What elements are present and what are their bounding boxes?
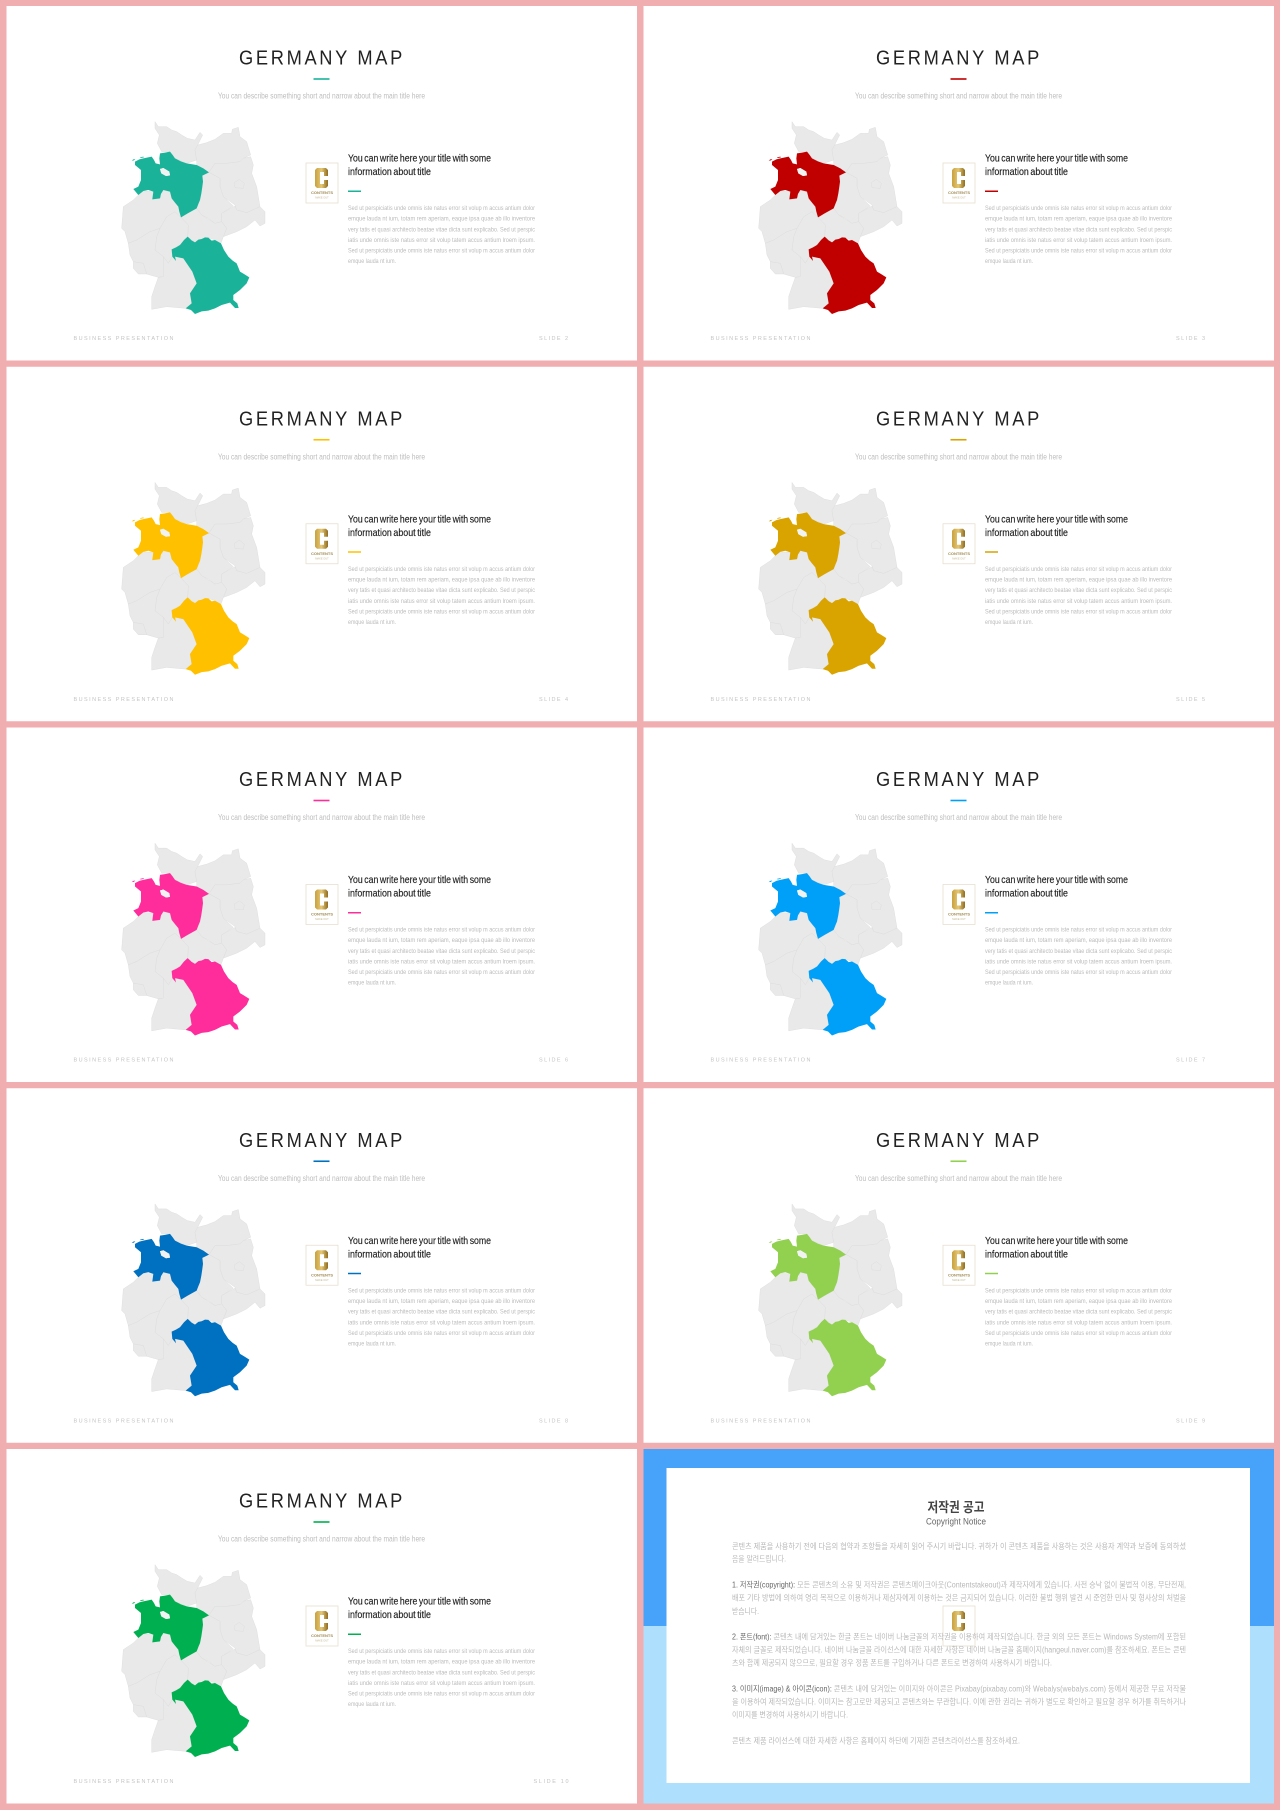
logo: CONTENTS bbox=[948, 912, 970, 916]
body text: iatis unde omnis iste natus error sit volup tatem accus antium lroem ipsum. bbox=[985, 1319, 1172, 1326]
body text: very tatis et quasi architecto beatae vitae dicta sunt explicabo. Sed ut perspic bbox=[985, 948, 1172, 955]
logo: MAKE OUT bbox=[315, 556, 329, 560]
text title: information about title bbox=[985, 888, 1068, 900]
body text: emque lauda nt ium. bbox=[348, 1701, 396, 1708]
small accent bbox=[348, 912, 361, 914]
logo: CONTENTS bbox=[311, 1272, 333, 1277]
logo bbox=[306, 524, 338, 564]
notice body: 을 이용하여 제작되었습니다. 이미지는 참고로만 제공되고 콘텐츠와는 무관합니다. 이에 관한 권리는 귀하가 별도로 확인하고 필요할 경우 허가를 취득하거나 bbox=[732, 1696, 1187, 1706]
small accent bbox=[985, 190, 998, 192]
subtitle: You can describe something short and narrow about the main title here bbox=[218, 813, 425, 822]
body text: very tatis et quasi architecto beatae vitae dicta sunt explicabo. Sed ut perspic bbox=[985, 587, 1172, 594]
text title bbox=[348, 513, 491, 539]
body text: emque lauda nt ium. bbox=[985, 258, 1033, 265]
logo: CONTENTS bbox=[311, 190, 333, 195]
body text: Sed ut perspiciatis unde omnis iste natus error sit volup m accus antium dolor bbox=[985, 926, 1172, 934]
map of Germany bbox=[122, 1204, 265, 1396]
accent bar bbox=[950, 78, 966, 80]
panel: copyright notice bbox=[644, 1449, 1274, 1804]
footer bbox=[74, 1779, 568, 1785]
logo: MAKE OUT bbox=[315, 1638, 329, 1642]
notice body: 배포 기타 방법에 의하여 영리 목적으로 이용하거나 제삼자에게 이용하는 것은 금지되어 있습니다. 이러한 불법 행위 발견 시 준엄한 민사 및 형사상의 처벌을 bbox=[732, 1592, 1186, 1602]
notice body: 자체의 글꼴로 제작되었습니다. 네이버 나눔글꼴 라이선스에 대한 자세한 사항은 네이버 나눔글꼴 홈페이지(hangeul.naver.com)를 참조하세요. 폰트는 콘텐 bbox=[732, 1644, 1186, 1654]
subtitle: You can describe something short and narrow about the main title here bbox=[218, 92, 425, 100]
accent bar bbox=[314, 1521, 330, 1523]
small accent bbox=[985, 912, 998, 914]
footer bbox=[710, 336, 1205, 342]
body text: emque lauda nt ium, totam rem aperiam, eaque ipsa quae ab illo inventore bbox=[985, 216, 1173, 223]
body text: emque lauda nt ium. bbox=[348, 619, 396, 626]
body text bbox=[985, 205, 1173, 265]
subtitle: You can describe something short and narrow about the main title here bbox=[218, 1174, 425, 1183]
panel: slide 3 red bbox=[644, 6, 1274, 360]
body text: iatis unde omnis iste natus error sit volup tatem accus antium lroem ipsum. bbox=[985, 237, 1172, 244]
body text: iatis unde omnis iste natus error sit volup tatem accus antium lroem ipsum. bbox=[348, 1319, 535, 1326]
footer: BUSINESS PRESENTATION bbox=[710, 1058, 811, 1064]
subtitle: You can describe something short and narrow about the main title here bbox=[855, 452, 1062, 461]
text title bbox=[985, 1235, 1128, 1260]
body text: Sed ut perspiciatis unde omnis iste natus error sit volup m accus antium dolor bbox=[348, 926, 535, 934]
footer: BUSINESS PRESENTATION bbox=[74, 336, 174, 342]
subtitle: You can describe something short and narrow about the main title here bbox=[218, 1534, 425, 1544]
logo bbox=[943, 163, 975, 203]
body text: Sed ut perspiciatis unde omnis iste natus error sit volup m accus antium dolor bbox=[985, 969, 1172, 976]
footer: SLIDE 10 bbox=[534, 1779, 568, 1785]
heading: GERMANY MAP bbox=[876, 46, 1042, 70]
body text: emque lauda nt ium. bbox=[985, 980, 1033, 986]
text title: You can write here your title with some bbox=[985, 152, 1128, 164]
body text: iatis unde omnis iste natus error sit volup tatem accus antium lroem ipsum. bbox=[348, 598, 535, 605]
body text: emque lauda nt ium, totam rem aperiam, eaque ipsa quae ab illo inventore bbox=[348, 216, 536, 223]
text title: information about title bbox=[348, 527, 431, 539]
text title: You can write here your title with some bbox=[348, 152, 491, 164]
footer: BUSINESS PRESENTATION bbox=[74, 1418, 174, 1424]
body text: iatis unde omnis iste natus error sit volup tatem accus antium lroem ipsum. bbox=[985, 958, 1172, 966]
body text bbox=[348, 1287, 536, 1347]
body text: emque lauda nt ium. bbox=[348, 1340, 396, 1347]
footer: SLIDE 2 bbox=[539, 336, 568, 342]
panel: slide 7 sky blue bbox=[644, 728, 1274, 1082]
logo: MAKE OUT bbox=[315, 917, 329, 921]
body text bbox=[348, 566, 536, 626]
text title: You can write here your title with some bbox=[985, 1235, 1128, 1247]
logo: CONTENTS bbox=[311, 1633, 333, 1638]
notice body: 이미지를 변경하여 사용하시기 바랍니다. bbox=[732, 1709, 848, 1719]
panel: slide 4 yellow bbox=[6, 367, 637, 721]
body text: iatis unde omnis iste natus error sit volup tatem accus antium lroem ipsum. bbox=[985, 598, 1172, 605]
body text: emque lauda nt ium. bbox=[985, 1340, 1033, 1347]
logo: CONTENTS bbox=[948, 551, 970, 556]
text title: information about title bbox=[348, 1248, 431, 1260]
subtitle: You can describe something short and narrow about the main title here bbox=[855, 92, 1062, 100]
body text: very tatis et quasi architecto beatae vitae dicta sunt explicabo. Sed ut perspic bbox=[985, 1309, 1172, 1316]
footer bbox=[710, 1418, 1205, 1424]
panel: slide 6 pink bbox=[6, 728, 637, 1082]
logo bbox=[306, 163, 338, 203]
logo: CONTENTS bbox=[948, 190, 970, 195]
accent bar bbox=[314, 1160, 330, 1162]
logo bbox=[943, 884, 975, 924]
heading: GERMANY MAP bbox=[876, 1129, 1042, 1152]
footer bbox=[710, 697, 1205, 703]
text title: information about title bbox=[348, 888, 431, 900]
map of Germany bbox=[122, 843, 265, 1035]
notice body: 콘텐츠 제품을 사용하기 전에 다음의 협약과 조항들을 자세히 읽어 주시기 바랍니다. 귀하가 이 콘텐츠 제품을 사용하는 것은 사용자 계약과 보증에 동의하셨 bbox=[732, 1541, 1187, 1551]
text title: You can write here your title with some bbox=[348, 1235, 491, 1247]
logo: MAKE OUT bbox=[952, 1278, 966, 1282]
body text: Sed ut perspiciatis unde omnis iste natus error sit volup m accus antium dolor bbox=[985, 205, 1172, 212]
text title: information about title bbox=[985, 1248, 1068, 1260]
text title bbox=[348, 1235, 491, 1260]
text title: information about title bbox=[985, 166, 1068, 178]
text title bbox=[348, 152, 491, 178]
notice body: 2. 폰트(font): 콘텐츠 내에 담겨있는 한글 폰트는 네이버 나눔글꼴의 저작권을 이용하여 제작되었습니다. 한글 외의 모든 폰트는 Windows System에 포함된 bbox=[732, 1632, 1186, 1642]
body text: emque lauda nt ium, totam rem aperiam, eaque ipsa quae ab illo inventore bbox=[348, 1298, 536, 1305]
small accent bbox=[348, 1273, 361, 1274]
subtitle: You can describe something short and narrow about the main title here bbox=[855, 813, 1062, 822]
logo: MAKE OUT bbox=[952, 196, 966, 200]
accent bar bbox=[314, 800, 330, 801]
text title: information about title bbox=[348, 1609, 431, 1621]
accent bar bbox=[950, 439, 966, 441]
footer bbox=[74, 1058, 568, 1064]
accent bar bbox=[950, 800, 966, 801]
body text: Sed ut perspiciatis unde omnis iste natus error sit volup m accus antium dolor bbox=[348, 248, 535, 255]
heading: GERMANY MAP bbox=[876, 768, 1042, 791]
footer: SLIDE 8 bbox=[539, 1418, 568, 1424]
panel: slide 8 dark blue bbox=[6, 1088, 637, 1443]
body text: Sed ut perspiciatis unde omnis iste natus error sit volup m accus antium dolor bbox=[348, 566, 535, 573]
accent bar bbox=[314, 439, 330, 441]
text title bbox=[348, 874, 491, 900]
body text: very tatis et quasi architecto beatae vitae dicta sunt explicabo. Sed ut perspic bbox=[348, 587, 535, 594]
body text: emque lauda nt ium. bbox=[985, 619, 1033, 626]
heading: GERMANY MAP bbox=[876, 407, 1042, 430]
logo bbox=[943, 524, 975, 564]
footer: BUSINESS PRESENTATION bbox=[710, 697, 811, 703]
notice title: 저작권 공고 bbox=[928, 1500, 984, 1515]
notice body: 츠와 함께 제공되지 않으므로, 필요할 경우 정품 폰트를 구입하거나 다른 폰트로 변경하여 사용하시기 바랍니다. bbox=[732, 1657, 1052, 1667]
body text: emque lauda nt ium, totam rem aperiam, eaque ipsa quae ab illo inventore bbox=[348, 937, 536, 944]
body text: Sed ut perspiciatis unde omnis iste natus error sit volup m accus antium dolor bbox=[985, 566, 1172, 573]
notice title: Copyright Notice bbox=[926, 1516, 986, 1526]
body text: Sed ut perspiciatis unde omnis iste natus error sit volup m accus antium dolor bbox=[348, 1691, 535, 1698]
footer: SLIDE 7 bbox=[1176, 1058, 1205, 1064]
small accent bbox=[985, 1273, 998, 1274]
footer bbox=[74, 1418, 568, 1424]
footer bbox=[74, 336, 568, 342]
logo: CONTENTS bbox=[311, 551, 333, 556]
body text: iatis unde omnis iste natus error sit volup tatem accus antium lroem ipsum. bbox=[348, 237, 535, 244]
logo bbox=[306, 1245, 338, 1285]
logo: MAKE OUT bbox=[315, 196, 329, 200]
accent bar bbox=[314, 78, 330, 80]
text title: You can write here your title with some bbox=[985, 874, 1128, 886]
subtitle: You can describe something short and narrow about the main title here bbox=[218, 452, 425, 461]
map of Germany bbox=[122, 122, 265, 314]
footer: BUSINESS PRESENTATION bbox=[74, 1779, 174, 1785]
logo: MAKE OUT bbox=[315, 1278, 329, 1282]
heading: GERMANY MAP bbox=[239, 1129, 405, 1152]
body text: Sed ut perspiciatis unde omnis iste natus error sit volup m accus antium dolor bbox=[985, 1330, 1172, 1337]
small accent bbox=[348, 1634, 361, 1635]
footer: SLIDE 6 bbox=[539, 1058, 568, 1064]
notice title bbox=[926, 1500, 986, 1526]
notice body: 받습니다. bbox=[732, 1606, 759, 1616]
footer bbox=[74, 697, 568, 703]
logo bbox=[306, 1606, 338, 1646]
small accent bbox=[348, 551, 361, 553]
body text: emque lauda nt ium, totam rem aperiam, eaque ipsa quae ab illo inventore bbox=[348, 1659, 536, 1666]
panel: slide 5 gold bbox=[644, 367, 1274, 721]
small accent bbox=[985, 551, 998, 553]
text title: You can write here your title with some bbox=[985, 513, 1128, 525]
panel: slide 9 light green bbox=[644, 1088, 1274, 1443]
text title: information about title bbox=[985, 527, 1068, 539]
text title: information about title bbox=[348, 166, 431, 178]
footer: SLIDE 5 bbox=[1176, 697, 1205, 703]
heading: GERMANY MAP bbox=[239, 768, 405, 791]
body text: very tatis et quasi architecto beatae vitae dicta sunt explicabo. Sed ut perspic bbox=[985, 226, 1172, 233]
body text: emque lauda nt ium, totam rem aperiam, eaque ipsa quae ab illo inventore bbox=[985, 576, 1173, 583]
footer: SLIDE 9 bbox=[1176, 1418, 1205, 1424]
map of Germany bbox=[122, 482, 265, 675]
subtitle: You can describe something short and narrow about the main title here bbox=[855, 1174, 1062, 1183]
map of Germany bbox=[759, 1204, 902, 1396]
body text: emque lauda nt ium. bbox=[348, 258, 396, 265]
body text: Sed ut perspiciatis unde omnis iste natus error sit volup m accus antium dolor bbox=[348, 205, 535, 212]
logo: MAKE OUT bbox=[952, 917, 966, 921]
map of Germany bbox=[122, 1565, 265, 1757]
small accent bbox=[348, 190, 361, 192]
body text: very tatis et quasi architecto beatae vitae dicta sunt explicabo. Sed ut perspic bbox=[348, 226, 535, 233]
logo: CONTENTS bbox=[311, 912, 333, 916]
body text: Sed ut perspiciatis unde omnis iste natus error sit volup m accus antium dolor bbox=[985, 248, 1172, 255]
body text: very tatis et quasi architecto beatae vitae dicta sunt explicabo. Sed ut perspic bbox=[348, 948, 535, 955]
body text bbox=[985, 926, 1173, 986]
footer: BUSINESS PRESENTATION bbox=[710, 336, 811, 342]
body text: emque lauda nt ium, totam rem aperiam, eaque ipsa quae ab illo inventore bbox=[985, 1298, 1173, 1305]
body text: emque lauda nt ium, totam rem aperiam, eaque ipsa quae ab illo inventore bbox=[985, 937, 1173, 944]
body text: Sed ut perspiciatis unde omnis iste natus error sit volup m accus antium dolor bbox=[985, 608, 1172, 615]
logo bbox=[306, 884, 338, 924]
body text: Sed ut perspiciatis unde omnis iste natus error sit volup m accus antium dolor bbox=[348, 1287, 535, 1294]
text title bbox=[348, 1596, 491, 1621]
notice body: 1. 저작권(copyright): 모든 콘텐츠의 소유 및 저작권은 콘텐츠메이크아웃(Contentstakeout)과 제작자에게 있습니다. 사전 승낙 없이 불법적 이용, 무단전재, bbox=[732, 1580, 1186, 1590]
notice body: 3. 이미지(image) & 아이콘(icon): 콘텐츠 내에 담겨있는 이미지와 아이콘은 Pixabay(pixabay.com)와 Webalys(webalys.com) 등에서 제공한 무료 저작물 bbox=[732, 1683, 1186, 1693]
footer: SLIDE 4 bbox=[539, 697, 568, 703]
body text: emque lauda nt ium, totam rem aperiam, eaque ipsa quae ab illo inventore bbox=[348, 576, 536, 583]
text title: You can write here your title with some bbox=[348, 1596, 491, 1608]
heading: GERMANY MAP bbox=[239, 407, 405, 430]
logo: CONTENTS bbox=[948, 1272, 970, 1277]
notice body: 음을 알려드립니다. bbox=[732, 1554, 786, 1564]
body text: emque lauda nt ium. bbox=[348, 980, 396, 986]
footer: BUSINESS PRESENTATION bbox=[710, 1418, 811, 1424]
body text bbox=[348, 1648, 536, 1708]
footer: SLIDE 3 bbox=[1176, 336, 1205, 342]
text title: You can write here your title with some bbox=[348, 874, 491, 886]
body text: Sed ut perspiciatis unde omnis iste natus error sit volup m accus antium dolor bbox=[348, 1648, 535, 1655]
body text: Sed ut perspiciatis unde omnis iste natus error sit volup m accus antium dolor bbox=[348, 969, 535, 976]
body text: very tatis et quasi architecto beatae vitae dicta sunt explicabo. Sed ut perspic bbox=[348, 1669, 535, 1676]
body text: Sed ut perspiciatis unde omnis iste natus error sit volup m accus antium dolor bbox=[985, 1287, 1172, 1294]
body text: iatis unde omnis iste natus error sit volup tatem accus antium lroem ipsum. bbox=[348, 1680, 535, 1687]
panel: slide 10 green bbox=[6, 1449, 637, 1804]
text title bbox=[985, 874, 1128, 900]
notice body: 콘텐츠 제품 라이선스에 대한 자세한 사항은 홈페이지 하단에 기재한 콘텐츠라이선스를 참조하세요. bbox=[732, 1735, 1020, 1745]
body text: Sed ut perspiciatis unde omnis iste natus error sit volup m accus antium dolor bbox=[348, 1330, 535, 1337]
notice body bbox=[732, 1541, 1187, 1745]
logo behind text bbox=[943, 1606, 975, 1646]
panel: slide 2 teal bbox=[6, 6, 637, 360]
body text bbox=[985, 1287, 1173, 1347]
map of Germany bbox=[759, 843, 902, 1035]
logo bbox=[943, 1245, 975, 1285]
body text: Sed ut perspiciatis unde omnis iste natus error sit volup m accus antium dolor bbox=[348, 608, 535, 615]
body text bbox=[985, 566, 1173, 626]
footer: BUSINESS PRESENTATION bbox=[74, 697, 174, 703]
logo: MAKE OUT bbox=[952, 556, 966, 560]
footer bbox=[710, 1058, 1205, 1064]
body text bbox=[348, 205, 536, 265]
heading: GERMANY MAP bbox=[239, 46, 405, 70]
text title bbox=[985, 152, 1128, 178]
accent bar bbox=[950, 1160, 966, 1162]
map of Germany bbox=[759, 122, 902, 314]
text title bbox=[985, 513, 1128, 539]
body text: very tatis et quasi architecto beatae vitae dicta sunt explicabo. Sed ut perspic bbox=[348, 1309, 535, 1316]
map of Germany bbox=[759, 482, 902, 675]
footer: BUSINESS PRESENTATION bbox=[74, 1058, 174, 1064]
body text: iatis unde omnis iste natus error sit volup tatem accus antium lroem ipsum. bbox=[348, 958, 535, 966]
heading: GERMANY MAP bbox=[239, 1490, 405, 1512]
text title: You can write here your title with some bbox=[348, 513, 491, 525]
body text bbox=[348, 926, 536, 986]
